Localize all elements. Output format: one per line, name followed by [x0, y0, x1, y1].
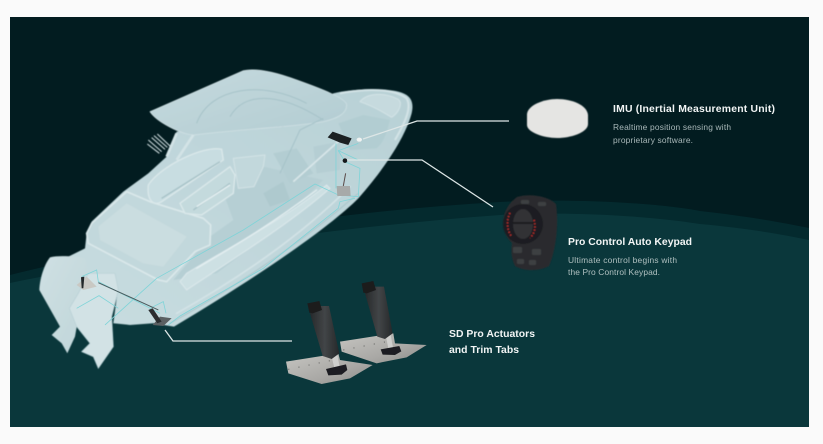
deck [173, 167, 323, 280]
starboard trim tab [148, 308, 172, 326]
IMU marker [357, 138, 362, 142]
boat hull [68, 89, 412, 327]
bow seating [338, 90, 409, 150]
leader line: IMU [363, 121, 509, 139]
text: keypad description [568, 255, 677, 277]
text: IMU description: proprietary software. [613, 135, 693, 145]
helm module [328, 132, 352, 145]
stern lounge seats [87, 149, 235, 282]
icon: front trim tab and actuator [286, 301, 373, 384]
icon: Pro Control keypad [503, 195, 557, 270]
text: IMU description [613, 122, 731, 145]
hardtop canopy [150, 70, 347, 135]
outboard motors [39, 256, 88, 353]
illustration: transparent boat [39, 70, 412, 368]
text: keypad heading: Pro Control Auto Keypad [568, 237, 692, 248]
text: IMU description: Realtime position sensing with [613, 122, 731, 132]
leader line: actuators [165, 330, 292, 341]
hull chines [170, 185, 358, 323]
text: IMU heading: IMU (Inertial Measurement Unit) [613, 104, 775, 115]
windshield and supports [167, 90, 340, 182]
rod holder rack [147, 134, 170, 153]
text: actuators heading: SD Pro Actuators [449, 329, 535, 340]
text: actuators heading [449, 329, 535, 356]
leader line: keypad [347, 160, 493, 207]
icon: rear trim tab and actuator [340, 281, 427, 363]
text: keypad description: Ultimate control begins with [568, 255, 677, 265]
helm and console [233, 142, 340, 207]
icon: IMU puck [527, 99, 588, 138]
text: keypad description: the Pro Control Keypad. [568, 267, 660, 277]
wiring lines [77, 143, 360, 325]
keypad marker [343, 158, 347, 163]
text: actuators heading: and Trim Tabs [449, 345, 519, 356]
battery [337, 173, 351, 196]
port trim tab [77, 277, 97, 290]
